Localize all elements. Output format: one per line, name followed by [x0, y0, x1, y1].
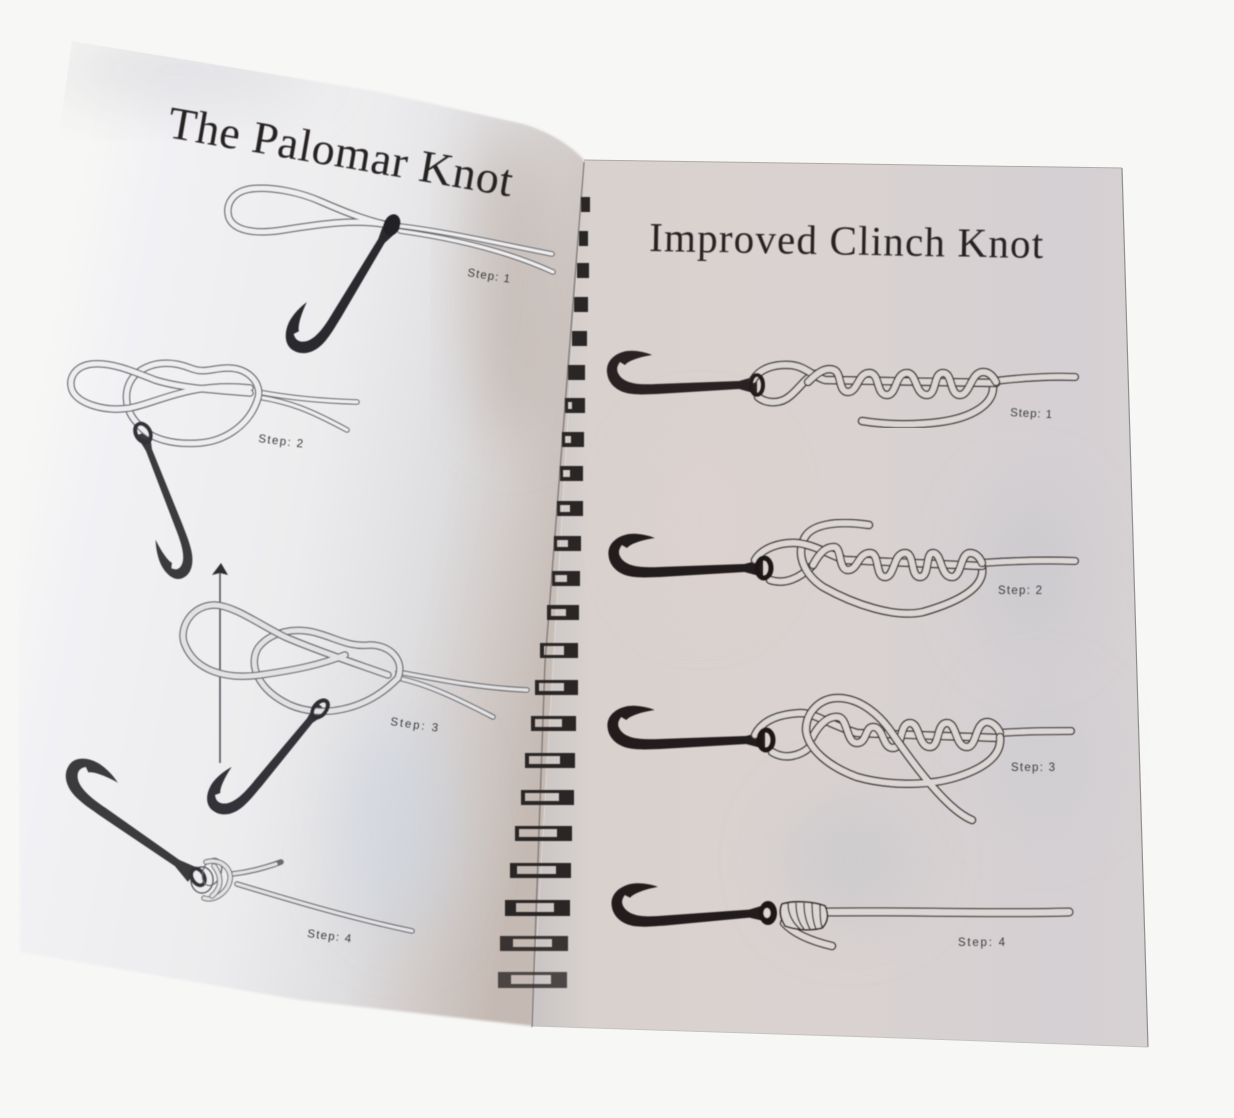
panel: Clinch step 1 — [607, 351, 1075, 424]
step label: Step: 3 — [390, 716, 439, 735]
standing line — [825, 907, 1069, 917]
step label: Step: 4 — [307, 928, 352, 945]
first loop — [183, 605, 388, 676]
spine line — [532, 162, 584, 1027]
eye loop upper — [755, 543, 982, 566]
step label: Step: 2 — [258, 433, 304, 450]
twisted coils — [812, 717, 1000, 748]
panel: left page — [18, 35, 584, 1026]
hook — [607, 351, 757, 394]
hook — [611, 879, 777, 928]
hook eye — [132, 421, 154, 445]
knot — [188, 856, 230, 899]
title: Improved Clinch Knot: Improved Clinch Knot — [649, 214, 1044, 267]
wrapped knot — [780, 902, 827, 930]
tag end — [862, 385, 993, 424]
standing line — [1000, 731, 1071, 733]
first loop — [71, 364, 250, 409]
eye loop — [753, 365, 996, 402]
hook — [607, 706, 765, 749]
standing line — [995, 377, 1075, 381]
panel: Palomar step 3 — [183, 563, 527, 824]
standing line — [982, 561, 1075, 563]
hook — [608, 534, 763, 577]
panel: Palomar step 1 — [228, 188, 553, 363]
hook eye — [751, 375, 763, 395]
hook — [277, 207, 403, 363]
hook — [199, 686, 328, 824]
hook — [56, 750, 213, 882]
twisted coils — [808, 369, 996, 395]
step label: Step: 1 — [467, 267, 511, 286]
twisted coils — [813, 547, 982, 577]
line tails — [400, 226, 553, 272]
step label: Step: 2 — [998, 585, 1042, 597]
step label: Step: 3 — [1011, 762, 1055, 774]
panel: Clinch step 2 — [608, 523, 1075, 613]
line tails — [398, 672, 527, 717]
hook eye — [759, 730, 773, 750]
step label: Step: 1 — [1010, 407, 1052, 421]
line loop — [228, 188, 393, 232]
hook eye — [309, 697, 331, 721]
second loop — [254, 630, 400, 711]
hook eye — [757, 558, 771, 578]
line tails — [258, 392, 357, 430]
panel: Clinch step 4 — [611, 879, 1069, 949]
tag end — [784, 923, 832, 946]
step label: Step: 4 — [958, 937, 1006, 949]
panel: right page — [532, 160, 1148, 1047]
eye loop upper — [755, 713, 1000, 738]
eye loop lower — [770, 566, 812, 582]
second loop — [126, 363, 259, 443]
title: The Palomar Knot: The Palomar Knot — [164, 97, 517, 206]
line tails — [232, 862, 412, 931]
panel: Palomar step 2 — [71, 363, 357, 583]
hook — [118, 431, 200, 583]
up arrow — [212, 563, 228, 763]
panel: Palomar step 4 — [56, 750, 412, 945]
big tag loop — [801, 523, 982, 613]
eye loop lower — [772, 747, 810, 756]
spiral binding rings — [498, 197, 590, 988]
panel: Clinch step 3 — [607, 698, 1071, 820]
big tag loop — [806, 698, 1000, 820]
